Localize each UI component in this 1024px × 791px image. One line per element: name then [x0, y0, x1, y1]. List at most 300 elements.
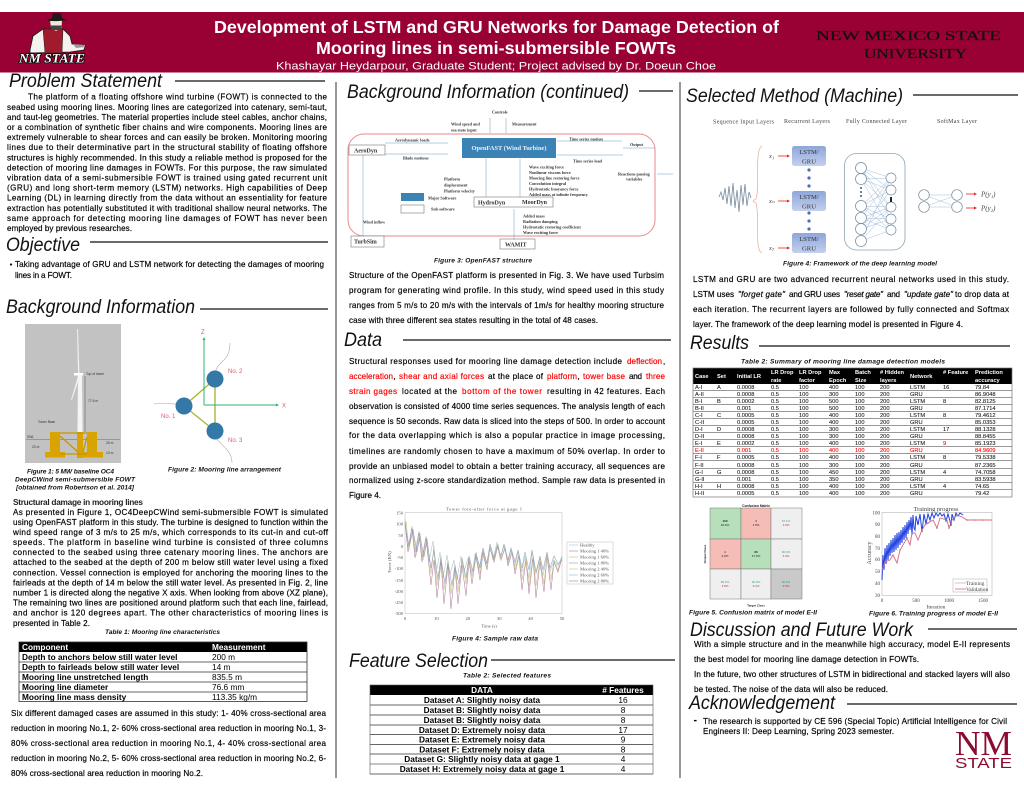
- table: summary of models: C-II: [695, 420, 705, 426]
- logo: NM State wordmark: NM: [955, 724, 1012, 763]
- figure 3: OpenFAST structure diagram: MoorDyn: [522, 200, 548, 206]
- table: summary of models: 0.001: [737, 448, 751, 454]
- table: summary of models: 0.0002: [737, 441, 754, 447]
- table: summary of models: 84.9609: [975, 448, 996, 454]
- table: summary of models: 0.5: [771, 427, 779, 433]
- figure 5: confusion matrix: 3.5%: [783, 584, 790, 588]
- table: selected features: 17: [618, 725, 628, 735]
- figure 4: sample raw data chart: 50: [398, 533, 404, 538]
- table: summary of models: 100: [799, 491, 808, 497]
- table: summary of models: 200: [880, 420, 890, 426]
- figure: deep learning framework: Sequence Input Layers: [713, 120, 775, 126]
- text block: OpenFAST description: Structure of the OpenFAST platform is presented in Fig. 3. We have used Turbsim: [349, 271, 664, 280]
- caption: table 1: Table 1: Mooring line characteristics: [105, 629, 220, 636]
- figure 1: turbine photo: Top of tower: [86, 372, 105, 376]
- text block: LSTM and GRU description: to drop data at: [955, 290, 1010, 299]
- text block: discussion: With a simple structure and in the meanwhile high accuracy, model E-II represents: [694, 640, 1010, 649]
- table: summary of models: # Hidden: [880, 370, 905, 376]
- table: summary of models: LSTM: [910, 399, 925, 405]
- table: summary of models: 200: [880, 406, 890, 412]
- table 1: mooring line characteristics: 14 m: [212, 662, 231, 672]
- figure 6: training progress chart: [867, 506, 992, 610]
- text block: data description: timelines are randomly chosen to have a maximum of 50% overlap. In order to: [349, 447, 665, 456]
- table: summary of models: 100: [855, 392, 864, 398]
- text block: LSTM and GRU description: LSTM uses: [693, 290, 734, 299]
- table: summary of models: 100: [855, 477, 864, 483]
- table: summary of models: 0.5: [771, 491, 779, 497]
- text block: structural damage: [12, 508, 329, 628]
- table: summary of models: LSTM: [910, 413, 925, 419]
- table: summary of models: A: [717, 385, 721, 391]
- figure 6: training progress chart: 40: [875, 582, 880, 587]
- text block: structural damage: speeds. The platform in baseline wind turbine is consisted of three columns: [13, 538, 328, 547]
- table: summary of models: 200: [880, 427, 890, 433]
- table: summary of models: F: [717, 455, 721, 461]
- icon: brace: [753, 146, 762, 253]
- text block: data description: and: [629, 372, 642, 381]
- recurrent layer boxes: GRU: [802, 158, 816, 166]
- table: summary of models: C: [717, 413, 721, 419]
- table: summary of models: 87.1714: [975, 406, 996, 412]
- text block: discussion: [694, 640, 1010, 694]
- table: summary of models: 200: [880, 463, 890, 469]
- table: summary of models: 100: [855, 434, 864, 440]
- table: summary of models: B: [717, 399, 721, 405]
- table: summary of models: 82.8125: [975, 399, 996, 405]
- figure 4: sample raw data chart: Healthy: [580, 542, 595, 548]
- text block: data description: Structural responses used for mooring line damage detection include: [349, 357, 622, 366]
- table: summary of models: 0.5: [771, 477, 779, 483]
- figure 2: mooring line arrangement: No. 1: [161, 414, 176, 420]
- text block: problem statement: or a combination of synthetic fiber chains and wire components. Mooring lines are: [7, 123, 327, 132]
- table: summary of models: 0.5: [771, 406, 779, 412]
- title: [214, 17, 779, 58]
- table: summary of models: 400: [829, 420, 838, 426]
- text block: LSTM and GRU description: "update gate": [904, 290, 954, 299]
- title: Mooring lines in semi-submersible FOWTs: [316, 38, 676, 58]
- table: selected features: 8: [621, 705, 626, 715]
- heading: discussion: Discussion and Future Work: [690, 620, 914, 641]
- table: summary of models: 8: [943, 399, 946, 405]
- table: summary of models: 100: [799, 413, 808, 419]
- table: summary of models: E-II: [695, 448, 704, 454]
- figure 2: mooring line arrangement: [154, 330, 286, 463]
- table: summary of models: 0.5: [771, 385, 779, 391]
- text block: structural damage: As presented in Figure 1, OC4DeepCWind semi-submersible FOWT is simulated: [13, 508, 328, 517]
- table: summary of models: 85.1923: [975, 441, 996, 447]
- text block: data description: located at the: [402, 387, 457, 396]
- figure 3: OpenFAST structure diagram: OpenFAST (Wind Turbine): [472, 145, 546, 152]
- text block: data description: for the data overlapping which is also a popular practice in image processing,: [349, 431, 665, 440]
- figure 3: OpenFAST structure diagram: AeroDyn: [354, 148, 378, 154]
- figure 5: confusion matrix: Output Class: [703, 544, 707, 563]
- figure 2: mooring line arrangement: X: [282, 404, 286, 410]
- figure 4: sample raw data chart: [387, 506, 613, 628]
- text block: LSTM and GRU description: each iteration. The recurrent layers are followed by fully connected and Softmax: [693, 305, 1009, 314]
- figure 3: OpenFAST structure diagram: Added mass: [523, 214, 545, 218]
- figure 4: sample raw data chart: Tower fore-after force at gage 1: [446, 506, 523, 512]
- figure 3: OpenFAST structure diagram: sea state input: [451, 128, 477, 132]
- table: selected features: Dataset E: Extremely noisy data: [419, 734, 545, 744]
- table: summary of models: LSTM: [910, 484, 925, 490]
- table: selected features: 16: [618, 695, 628, 705]
- figure 4: sample raw data chart: Mooring 1 60%: [580, 554, 609, 560]
- text block: damaged cases: 80% cross-sectional area reduction in mooring No.2.: [11, 769, 203, 778]
- table: summary of models: 100: [799, 484, 808, 490]
- table: summary of models: B-I: [695, 399, 703, 405]
- softmax layer network: P(y₂): [980, 204, 996, 212]
- table: summary of models: 100: [855, 448, 864, 454]
- table: summary of models: Batch: [855, 370, 871, 376]
- table: summary of models: 400: [829, 455, 838, 461]
- logo: NM State mascot: [18, 13, 85, 66]
- figure 6: training progress chart: 1500: [978, 599, 988, 604]
- panel: data: [344, 330, 671, 642]
- table: summary of models: 400: [829, 385, 838, 391]
- text block: problem statement: (GRU) and long short-term memory (LSTM) networks. High capabilities of Deep: [7, 184, 327, 193]
- table: summary of models: 100: [799, 392, 808, 398]
- figure 1: turbine photo: 77.6 m: [88, 399, 98, 403]
- table: summary of models: 350: [829, 477, 838, 483]
- panel: acknowledgement: [688, 693, 1017, 772]
- table: summary of models: 100: [855, 385, 864, 391]
- table: summary of models: 0.5: [771, 399, 779, 405]
- table: summary of models: 300: [829, 392, 838, 398]
- table: summary of models: 0.5: [771, 470, 779, 476]
- table: summary of models: 400: [829, 484, 838, 490]
- recurrent layer boxes: LSTM/: [799, 149, 819, 156]
- text block: data description: bottom of the tower: [462, 387, 542, 396]
- table: summary of models: 200: [880, 434, 890, 440]
- figure 3: OpenFAST structure diagram: [348, 110, 673, 249]
- text block: problem statement: and taut-leg geometries. The material properties include steel cables, anchor chains,: [7, 113, 327, 122]
- figure 5: confusion matrix: 3.8%: [722, 584, 729, 588]
- figure 4: sample raw data chart: Mooring 2 60%: [580, 572, 609, 578]
- table: summary of models: layers: [880, 378, 896, 384]
- table 1: mooring line characteristics: 76.6 mm: [212, 682, 244, 692]
- caption: figure 2: Figure 2: Mooring line arrangement: [168, 466, 282, 474]
- heading: background information: Background Information: [6, 297, 195, 318]
- table: selected features: DATA: [471, 685, 493, 695]
- figure 5: confusion matrix: 96.9%: [752, 580, 761, 584]
- panel: objective: [6, 235, 328, 280]
- text block: objective: lines in a FOWT.: [15, 271, 72, 280]
- table: summary of models: G-II: [695, 477, 705, 483]
- text block: LSTM and GRU description: and GRU uses: [789, 290, 840, 299]
- text block: problem statement: same approach for detecting mooring line damages of FOWT has never been: [7, 214, 327, 223]
- table: selected features: Dataset F: Extremely noisy data: [419, 744, 545, 754]
- table: summary of models: 0.001: [737, 406, 751, 412]
- table 1: mooring line characteristics: [19, 642, 307, 702]
- text block: acknowledgement: Engineers II: Deep Learning, Spring 2023 semester.: [703, 727, 894, 736]
- table: summary of models: 500: [829, 399, 838, 405]
- text block: structural damage: The remaining two lines are positioned around platform such that each line, fairlead,: [13, 599, 328, 608]
- figure 3: OpenFAST structure diagram: Reactions passing: [618, 172, 651, 176]
- figure 6: training progress chart: 90: [875, 523, 880, 528]
- figure 6: training progress chart: 60: [875, 558, 880, 563]
- text block: acknowledgement: [694, 717, 1007, 736]
- text block: OpenFAST description: [349, 271, 665, 325]
- table: summary of models: GRU: [910, 406, 923, 412]
- input labels and arrows: [768, 153, 790, 252]
- table: summary of models: 100: [855, 470, 864, 476]
- table: summary of models: 100: [799, 420, 808, 426]
- table: summary of models: 0.0002: [737, 399, 754, 405]
- table: summary of models: 0.5: [771, 448, 779, 454]
- table: selected features: # Features: [602, 685, 644, 695]
- table: summary of models: 0.001: [737, 477, 751, 483]
- text block: data description: tower base: [583, 372, 625, 381]
- figure 5: confusion matrix: 2.0%: [722, 554, 729, 558]
- figure 3: OpenFAST structure diagram: Aerodynamic loads: [395, 138, 430, 142]
- text block: data description: strain gages: [349, 387, 397, 396]
- figure 4: sample raw data chart: Time (s): [481, 624, 497, 628]
- table: summary of models: 100: [855, 441, 864, 447]
- table: selected features: 8: [621, 715, 626, 725]
- recurrent layer boxes: GRU: [802, 246, 816, 252]
- table: summary of models: D: [717, 427, 721, 433]
- text block: data description: observation is consisted of 4000 time series sequences. The analysis length of each: [349, 402, 665, 411]
- table 1: mooring line characteristics: Measurement: [212, 642, 266, 652]
- figure 4: sample raw data chart: -100: [395, 566, 404, 571]
- figure 4: sample raw data chart: -150: [395, 578, 404, 583]
- figure 4: sample raw data chart: Mooring 1 80%: [580, 560, 609, 566]
- heading: selected method: Selected Method (Machine): [686, 86, 903, 107]
- figure 1: turbine photo: 26 m: [106, 441, 114, 445]
- figure 3: OpenFAST structure diagram: HydroDyn: [478, 200, 506, 206]
- table: summary of models: 100: [855, 463, 864, 469]
- table: summary of models: factor: [799, 378, 816, 384]
- figure 3: OpenFAST structure diagram: Platform: [444, 176, 461, 182]
- table: summary of models: 100: [799, 434, 808, 440]
- table 1: mooring line characteristics: Depth to anchors below still water level: [22, 652, 177, 662]
- table: summary of models: 100: [799, 455, 808, 461]
- text block: structural damage: number 1 is directed along the negative X axis. When looking from above (XZ plane),: [13, 588, 328, 598]
- table: summary of models: 79.42: [975, 491, 989, 497]
- heading: acknowledgement: Acknowledgement: [688, 693, 836, 714]
- figure 3: OpenFAST structure diagram: WAMIT: [505, 242, 527, 248]
- table: summary of models: 200: [880, 477, 890, 483]
- table: summary of models: 4: [943, 470, 946, 476]
- table: summary of models: LSTM: [910, 455, 925, 461]
- text block: problem statement: extremely vulnerable to shear forces and can easily be broken. Monitoring mooring: [7, 133, 327, 142]
- text block: structural damage: and anchor is 120 degrees apart. The other characteristics of mooring lines is: [13, 609, 328, 618]
- table: summary of models: A-II: [695, 392, 704, 398]
- table: summary of models: 74.7058: [975, 470, 996, 476]
- table: summary of models: 0.0008: [737, 392, 754, 398]
- table: summary of models: 8: [943, 455, 946, 461]
- figure 6: training progress chart: 1000: [944, 599, 954, 604]
- table: summary of models: 400: [829, 491, 838, 497]
- heading: problem statement: Problem Statement: [9, 71, 163, 92]
- panel: feature selection: [349, 651, 675, 774]
- table: summary of models: rate: [771, 378, 781, 384]
- table: summary of models: 17: [943, 427, 949, 433]
- figure 3: OpenFAST structure diagram: Hydrostatic buoyancy force: [529, 186, 579, 192]
- logo: NM State wordmark: STATE: [955, 755, 1012, 772]
- table 1: mooring line characteristics: Mooring line mass density: [22, 692, 127, 702]
- figure 6: training progress chart: 100: [872, 512, 880, 516]
- figure 6: training progress chart: Accuracy: [867, 542, 873, 564]
- text block: structural damage: using OpenFAST platform in this study. The turbine is designed to function within the: [13, 518, 328, 527]
- text block: acknowledgement: The research is supported by CE 596 (Special Topic) Artificial Intelligence for Civil: [703, 717, 1007, 726]
- table: summary of models: 100: [799, 448, 808, 454]
- table: summary of models: G-I: [695, 470, 703, 476]
- figure: deep learning framework: SoftMax Layer: [937, 118, 977, 125]
- figure 5: confusion matrix: 3: [755, 519, 757, 523]
- text block: problem statement: [7, 93, 328, 233]
- table: summary of models: 0.0008: [737, 427, 754, 433]
- text block: damaged cases: 80% cross-sectional area reduction in mooring No.1, 4- 40% cross-sectional area: [11, 739, 326, 748]
- figure 6: training progress chart: Validation: [966, 587, 988, 593]
- table: summary of models: 100: [799, 427, 808, 433]
- table: summary of models: LR Drop: [799, 370, 822, 376]
- text block: problem statement: employed by previous researches.: [7, 224, 132, 233]
- text block: problem statement: extraction has potentially substituted it with traditional shallow neural networks. The: [7, 204, 327, 213]
- figure 2: mooring line arrangement: Z: [201, 330, 205, 336]
- table: summary of models: 100: [799, 470, 808, 476]
- figure 1: turbine photo: 10 m: [106, 451, 114, 455]
- text block: data description: ,: [394, 372, 396, 381]
- recurrent layer boxes: LSTM/: [799, 194, 819, 201]
- figure 5: confusion matrix: 97.1%: [782, 519, 791, 523]
- figure 5: confusion matrix: 47.0%: [752, 554, 761, 558]
- table: summary of models: H-II: [695, 491, 705, 497]
- figure 3: OpenFAST structure diagram: Wind speed and: [451, 122, 480, 126]
- figure 5: confusion matrix: 96.2%: [721, 580, 730, 584]
- recurrent layer boxes: [792, 146, 826, 253]
- table: summary of models: 100: [799, 463, 808, 469]
- table: summary of models: 100: [855, 491, 864, 497]
- table: summary of models: 86.9048: [975, 392, 996, 398]
- figure 3: OpenFAST structure diagram: Platform velocity: [444, 188, 476, 194]
- table: summary of models: 0.5: [771, 463, 779, 469]
- table: summary of models: H: [717, 484, 721, 490]
- caption: figure 1: Figure 1: 5 MW baseline OC4: [27, 468, 114, 476]
- figure 4: sample raw data chart: -300: [395, 611, 404, 616]
- table 1: mooring line characteristics: 835.5 m: [212, 672, 242, 682]
- table: summary of models: Prediction: [975, 370, 1003, 376]
- caption: table 2 selected features: Table 2: Selected features: [463, 672, 551, 680]
- table: selected features: Dataset G: Slightly noisy data at gage 1: [404, 754, 560, 764]
- table: selected features: Dataset A: Slightly noisy data: [424, 695, 541, 705]
- table: summary of models: F-I: [695, 455, 702, 461]
- figure 4: sample raw data chart: 0: [404, 616, 407, 621]
- table: summary of models: 100: [855, 427, 864, 433]
- table: summary of models: 100: [799, 441, 808, 447]
- figure: deep learning framework: Recurrent Layers: [784, 119, 831, 125]
- text block: data description: at the place of: [488, 372, 544, 381]
- text block: discussion: the best model for mooring line damage detection in FOWTs.: [694, 655, 919, 664]
- table 1: mooring line characteristics: 200 m: [212, 652, 235, 662]
- table: summary of models: Network: [910, 374, 933, 380]
- table: summary of models: 500: [829, 406, 838, 412]
- table 1: mooring line characteristics: Mooring line unstretched length: [22, 672, 148, 682]
- figure 3: OpenFAST structure diagram: Major Software: [428, 196, 456, 200]
- table: summary of models: 200: [880, 392, 890, 398]
- figure 5: confusion matrix: 2.9%: [783, 523, 790, 527]
- text block: problem statement: structures is highly recommended. In this study a reliable method is proposed for the: [7, 153, 327, 162]
- table: selected features: Dataset D: Extremely noisy data: [419, 725, 546, 735]
- text block: discussion: be tested. The noise of the data will also be reduced.: [694, 685, 888, 694]
- table: summary of models: LSTM: [910, 385, 925, 391]
- figure 1: turbine photo: 20 m: [32, 445, 40, 449]
- figure 3: OpenFAST structure diagram: Time series motion: [569, 136, 604, 142]
- table: summary of models: GRU: [910, 463, 923, 469]
- panel: selected method: [686, 86, 1018, 329]
- table: selected features: 4: [621, 754, 626, 764]
- table: summary of models: 0.0005: [737, 413, 754, 419]
- icon: input signal wave: [719, 183, 751, 212]
- figure 6: training progress chart: 50: [875, 570, 880, 575]
- table: summary of models: 200: [880, 470, 890, 476]
- text block: data description: normalized using z-score standardization method. Sample raw data is presented in: [349, 476, 665, 485]
- figure 3: OpenFAST structure diagram: Radiation damping: [523, 219, 558, 224]
- table: summary of models: 0.5: [771, 441, 779, 447]
- table: summary of models: 200: [880, 455, 890, 461]
- input labels and arrows: xₙ: [768, 198, 775, 205]
- figure 6: training progress chart: 0: [881, 599, 884, 604]
- heading: feature selection: Feature Selection: [349, 651, 488, 672]
- softmax layer network: P(y₁): [980, 190, 996, 198]
- figure 1: turbine photo: Tower Base: [38, 420, 55, 424]
- table: selected features: 4: [621, 764, 626, 774]
- figure 6: training progress chart: 70: [875, 547, 880, 552]
- text block: OpenFAST description: program for generating wind profile. In this study, wind speed used in this study: [349, 286, 665, 295]
- table 1: mooring line characteristics: Component: [22, 642, 68, 652]
- table: summary of models: 0.5: [771, 434, 779, 440]
- table: summary of models: 83.5938: [975, 477, 996, 483]
- table: summary of models: Epoch: [829, 378, 847, 384]
- table: summary of models: 100: [855, 413, 864, 419]
- caption: results table: Table 2: Summary of mooring line damage detection models: [741, 358, 945, 366]
- figure 5: confusion matrix: 49.6%: [721, 523, 730, 527]
- figure 3: OpenFAST structure diagram: Controls: [492, 110, 508, 114]
- table 1: mooring line characteristics: Mooring line diameter: [22, 682, 109, 692]
- recurrent layer boxes: GRU: [802, 204, 816, 210]
- table: summary of models: 79.4612: [975, 413, 996, 419]
- text block: damaged cases: [11, 709, 326, 778]
- text block: data description: ,: [663, 357, 665, 366]
- figure 3: OpenFAST structure diagram: variables: [626, 176, 643, 182]
- table: summary of models: 0.0008: [737, 470, 754, 476]
- figure 3: OpenFAST structure diagram: TurbSim: [354, 240, 377, 246]
- table: summary of models: Max: [829, 370, 841, 376]
- figure 4: sample raw data chart: Mooring 2 80%: [580, 578, 609, 584]
- table: summary of models: 88.1328: [975, 427, 996, 433]
- figure 1: turbine photo: [25, 324, 121, 463]
- text block: problem statement: The platform of a floating offshore wind turbine (FOWT) is connected to the: [28, 93, 327, 102]
- text block: structural damage: fairleads at the depth of 14 m below the still water level. As presented in Fig. 2, line: [13, 578, 328, 587]
- figure 4: sample raw data chart: Force (KN): [387, 551, 392, 573]
- fully connected layer network: [844, 154, 905, 250]
- table: summary of models: 87.2365: [975, 463, 996, 469]
- figure 5: confusion matrix: Confusion Matrix: [742, 504, 770, 508]
- figure 6: training progress chart: Training progress: [913, 506, 959, 513]
- heading: objective: Objective: [6, 235, 80, 256]
- figure 3: OpenFAST structure diagram: Wind inflow: [363, 220, 385, 224]
- title: Development of LSTM and GRU Networks for Damage Detection of: [214, 17, 779, 37]
- table: summary of models: 400: [829, 413, 838, 419]
- text block: problem statement: detection of mooring line damages in FOWTs. For this purpose, the raw simulated: [7, 163, 327, 172]
- figure 4: sample raw data chart: -250: [395, 600, 404, 605]
- figure 5: confusion matrix: [703, 504, 802, 608]
- table: summary of models: 0.5: [771, 413, 779, 419]
- figure 5: confusion matrix: 4.0%: [783, 554, 790, 558]
- table: summary of models: 300: [829, 427, 838, 433]
- table: summary of models: 200: [880, 441, 890, 447]
- table: summary of models: 85.0353: [975, 420, 996, 426]
